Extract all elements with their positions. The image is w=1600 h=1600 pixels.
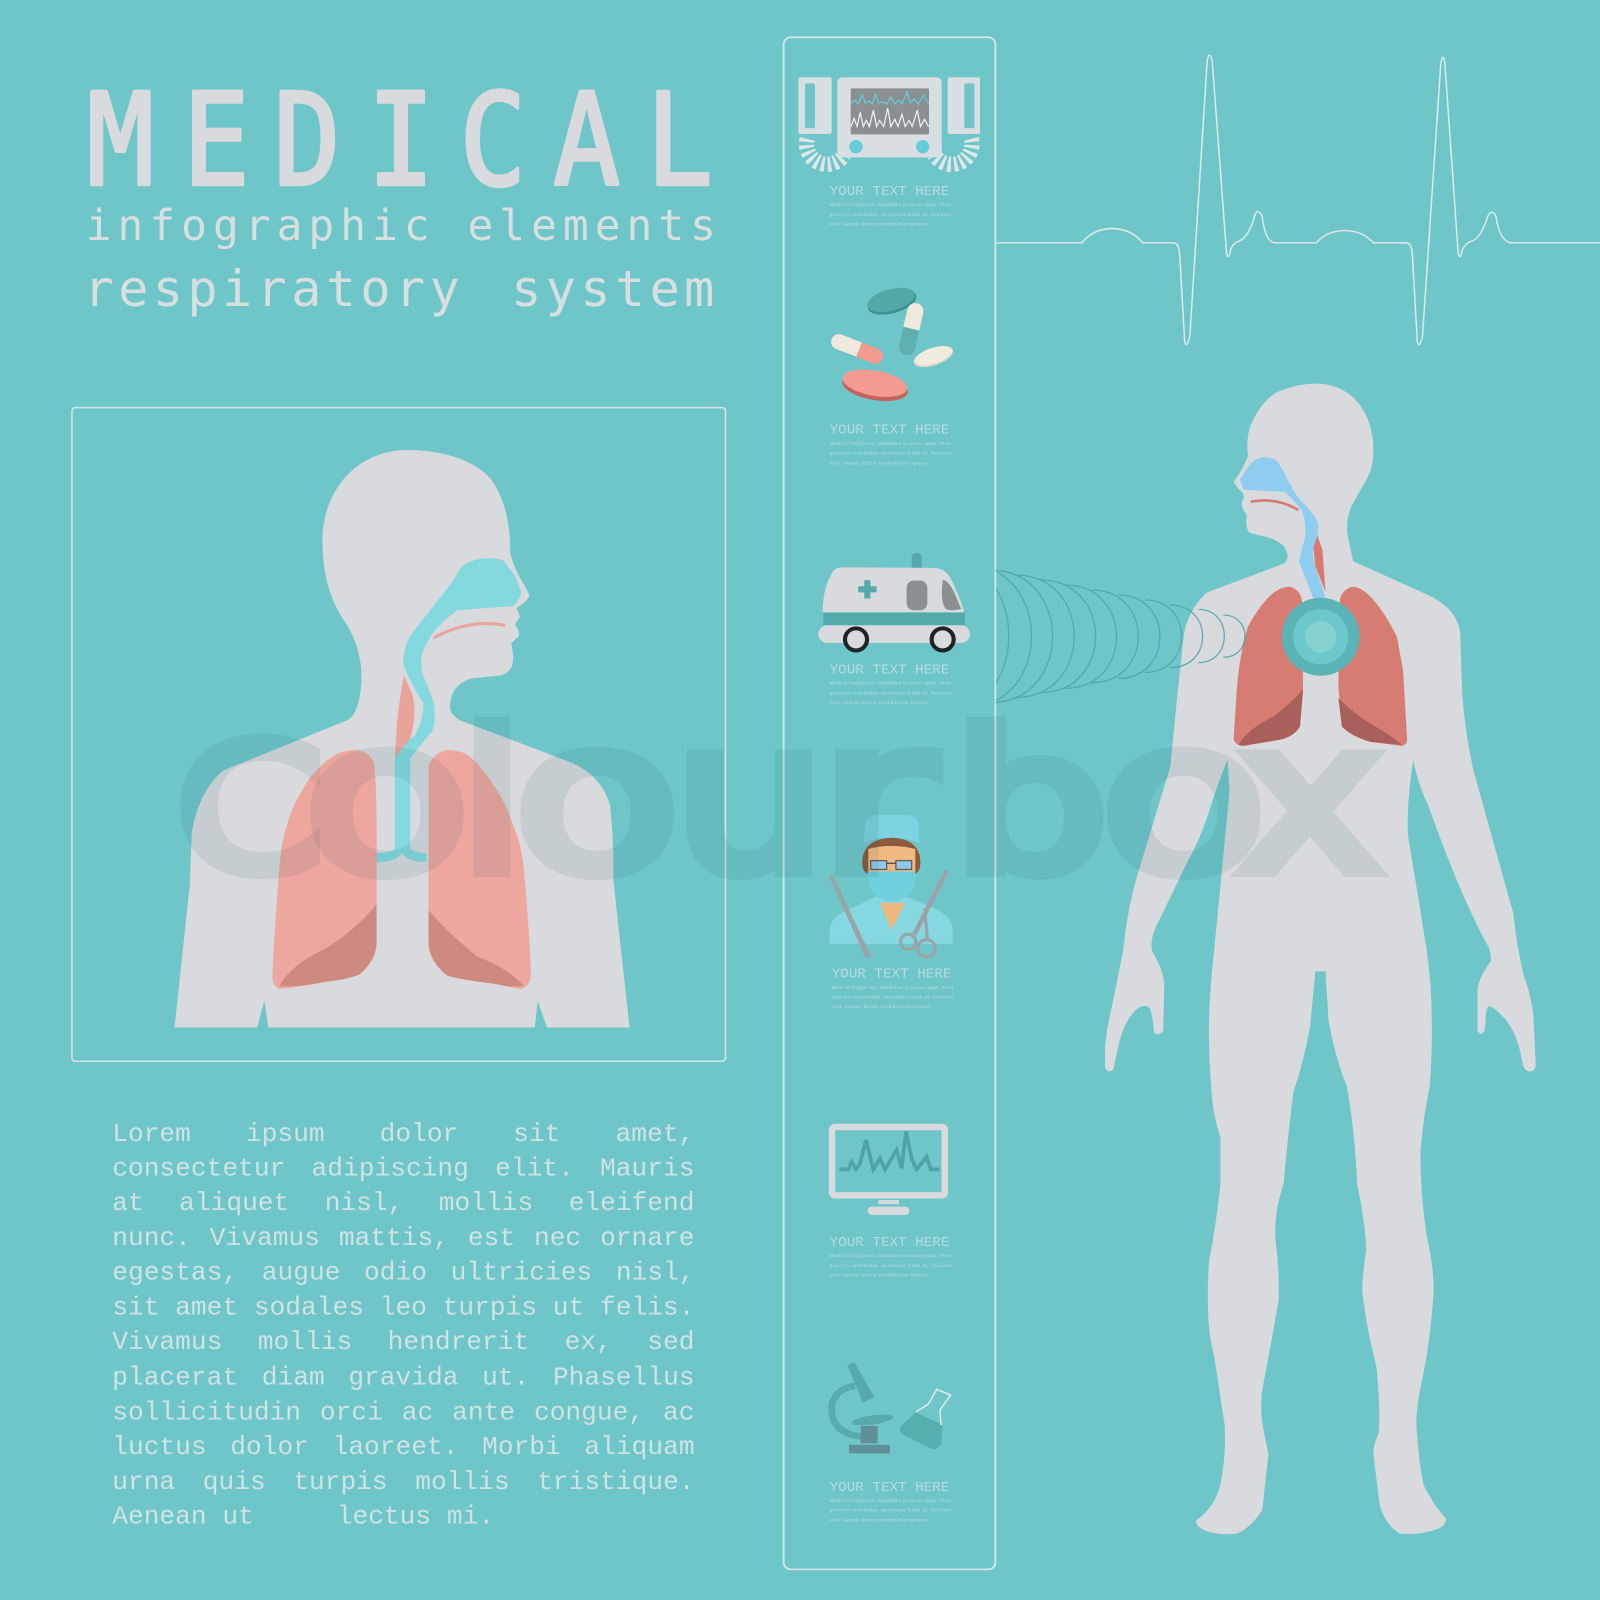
watermark: C [176, 707, 324, 912]
text block 2 [830, 423, 952, 465]
body text: sit amet sodales leo turpis ut felis. [112, 1292, 694, 1322]
panel: full body figure [1105, 384, 1536, 1534]
text block 4: quis orci vestibulum, accumsan lorem at, tincidunt [832, 994, 954, 999]
left lung lower lobe [280, 904, 377, 986]
icon: pills [831, 283, 955, 406]
airway [1240, 457, 1326, 598]
body text: Aenean ut [112, 1501, 254, 1531]
right lung lower lobe [1338, 698, 1402, 745]
text block 1 [830, 184, 952, 227]
text block 5 [830, 1235, 952, 1278]
neck [880, 903, 905, 930]
text block 3: velit. Aenean dictum condimentum tempus. [830, 700, 929, 705]
text block 1: YOUR TEXT HERE [830, 184, 949, 200]
text block 6: quis orci vestibulum, accumsan lorem at, tincidunt [830, 1508, 952, 1513]
panel: bust anatomy [174, 450, 630, 1028]
right lung [1338, 587, 1407, 746]
cap [863, 815, 919, 843]
text block 6: velit. Aenean dictum condimentum tempus. [830, 1517, 929, 1522]
left lung [272, 750, 377, 989]
lens circle [1282, 598, 1360, 676]
title: MEDICAL [87, 67, 713, 216]
text block 5: YOUR TEXT HERE [830, 1235, 949, 1251]
text block 5: Morbi id fringilla leo. Vestibulum in cursus quam. Proin [830, 1253, 952, 1258]
watermark: u [674, 677, 826, 921]
text block 4: velit. Aenean dictum condimentum tempus. [832, 1004, 931, 1009]
text block 1: velit. Aenean dictum condimentum tempus. [830, 222, 929, 227]
body text: egestas, augue odio ultricies nisl, [112, 1258, 695, 1288]
subtitle: respiratory system: system [511, 260, 719, 318]
body text: urna quis turpis mollis tristique. [112, 1467, 695, 1497]
esophagus [395, 676, 414, 760]
body text: at aliquet nisl, mollis eleifend [112, 1188, 695, 1218]
magnifier beam arcs [996, 570, 1246, 704]
text block 5: velit. Aenean dictum condimentum tempus. [830, 1273, 929, 1278]
text block 2: quis orci vestibulum, accumsan lorem at, tincidunt [830, 451, 952, 456]
text block 6 [830, 1480, 952, 1522]
text block 2: Morbi id fringilla leo. Vestibulum in cursus quam. Proin [830, 441, 952, 446]
right lung lower lobe [429, 910, 523, 986]
surgical gown [830, 896, 953, 944]
icon: monitor [832, 1127, 945, 1215]
text block 4: YOUR TEXT HERE [832, 967, 951, 983]
watermark: x [1238, 677, 1383, 920]
text block 6: YOUR TEXT HERE [830, 1480, 949, 1496]
icon: microscope and flask [832, 1363, 951, 1453]
watermark: o [514, 677, 680, 920]
esophagus [1313, 533, 1326, 592]
left lung [1234, 587, 1303, 746]
watermark [176, 676, 1383, 921]
icon: surgeon [828, 815, 953, 957]
text block 3: YOUR TEXT HERE [830, 662, 949, 678]
body text: placerat diam gravida ut. Phasellus [112, 1363, 695, 1393]
text block 3: quis orci vestibulum, accumsan lorem at, tincidunt [830, 690, 952, 695]
body text: Vivamus mollis hendrerit ex, sed [112, 1327, 695, 1357]
watermark: r [818, 676, 936, 920]
face [868, 846, 915, 880]
subtitle: respiratory system: respiratory [84, 260, 464, 318]
body silhouette [1105, 384, 1536, 1534]
glasses [871, 861, 887, 869]
text block 4 [832, 967, 954, 1009]
panel: centre column frame [784, 37, 995, 1569]
text block 1: quis orci vestibulum, accumsan lorem at, tincidunt [830, 212, 952, 217]
text block 6: Morbi id fringilla leo. Vestibulum in cursus quam. Proin [830, 1498, 952, 1503]
airway [377, 558, 521, 862]
watermark: o [304, 677, 470, 920]
watermark: l [460, 690, 524, 917]
text block 1: Morbi id fringilla leo. Vestibulum in cursus quam. Proin [830, 202, 952, 207]
panel: left bust frame [72, 408, 726, 1061]
watermark: o [1100, 677, 1267, 920]
body text: nunc. Vivamus mattis, est nec ornare [112, 1223, 694, 1253]
hair [862, 838, 920, 873]
palate line [1251, 500, 1298, 510]
icon: ambulance [818, 553, 970, 650]
palate line [434, 624, 505, 638]
text block 4: Morbi id fringilla leo. Vestibulum in cursus quam. Proin [832, 985, 954, 990]
bust silhouette [174, 450, 630, 1028]
body text: sollicitudin orci ac ante congue, ac [112, 1397, 694, 1427]
watermark: b [952, 691, 1109, 917]
text block 3: Morbi id fringilla leo. Vestibulum in cursus quam. Proin [830, 681, 952, 686]
body text: Lorem ipsum dolor sit amet, [112, 1119, 694, 1149]
text block 5: quis orci vestibulum, accumsan lorem at, tincidunt [830, 1263, 952, 1268]
left lung lower lobe [1238, 690, 1303, 746]
body text: lectus mi. [337, 1501, 494, 1531]
ECG line [996, 55, 1600, 344]
body text: luctus dolor laoreet. Morbi aliquam [112, 1432, 695, 1462]
text block 2: velit. Aenean dictum condimentum tempus. [830, 460, 929, 465]
subtitle: infographic elements: infographic elements [86, 201, 722, 251]
scissors [901, 870, 947, 957]
text block 3 [830, 662, 952, 705]
icon: defibrillator [798, 77, 980, 164]
body text [112, 1119, 695, 1531]
body text: consectetur adipiscing elit. Mauris [112, 1154, 694, 1184]
mask [867, 871, 915, 901]
right lung [429, 750, 531, 989]
text block 2: YOUR TEXT HERE [830, 423, 949, 439]
scalpel [828, 875, 871, 957]
